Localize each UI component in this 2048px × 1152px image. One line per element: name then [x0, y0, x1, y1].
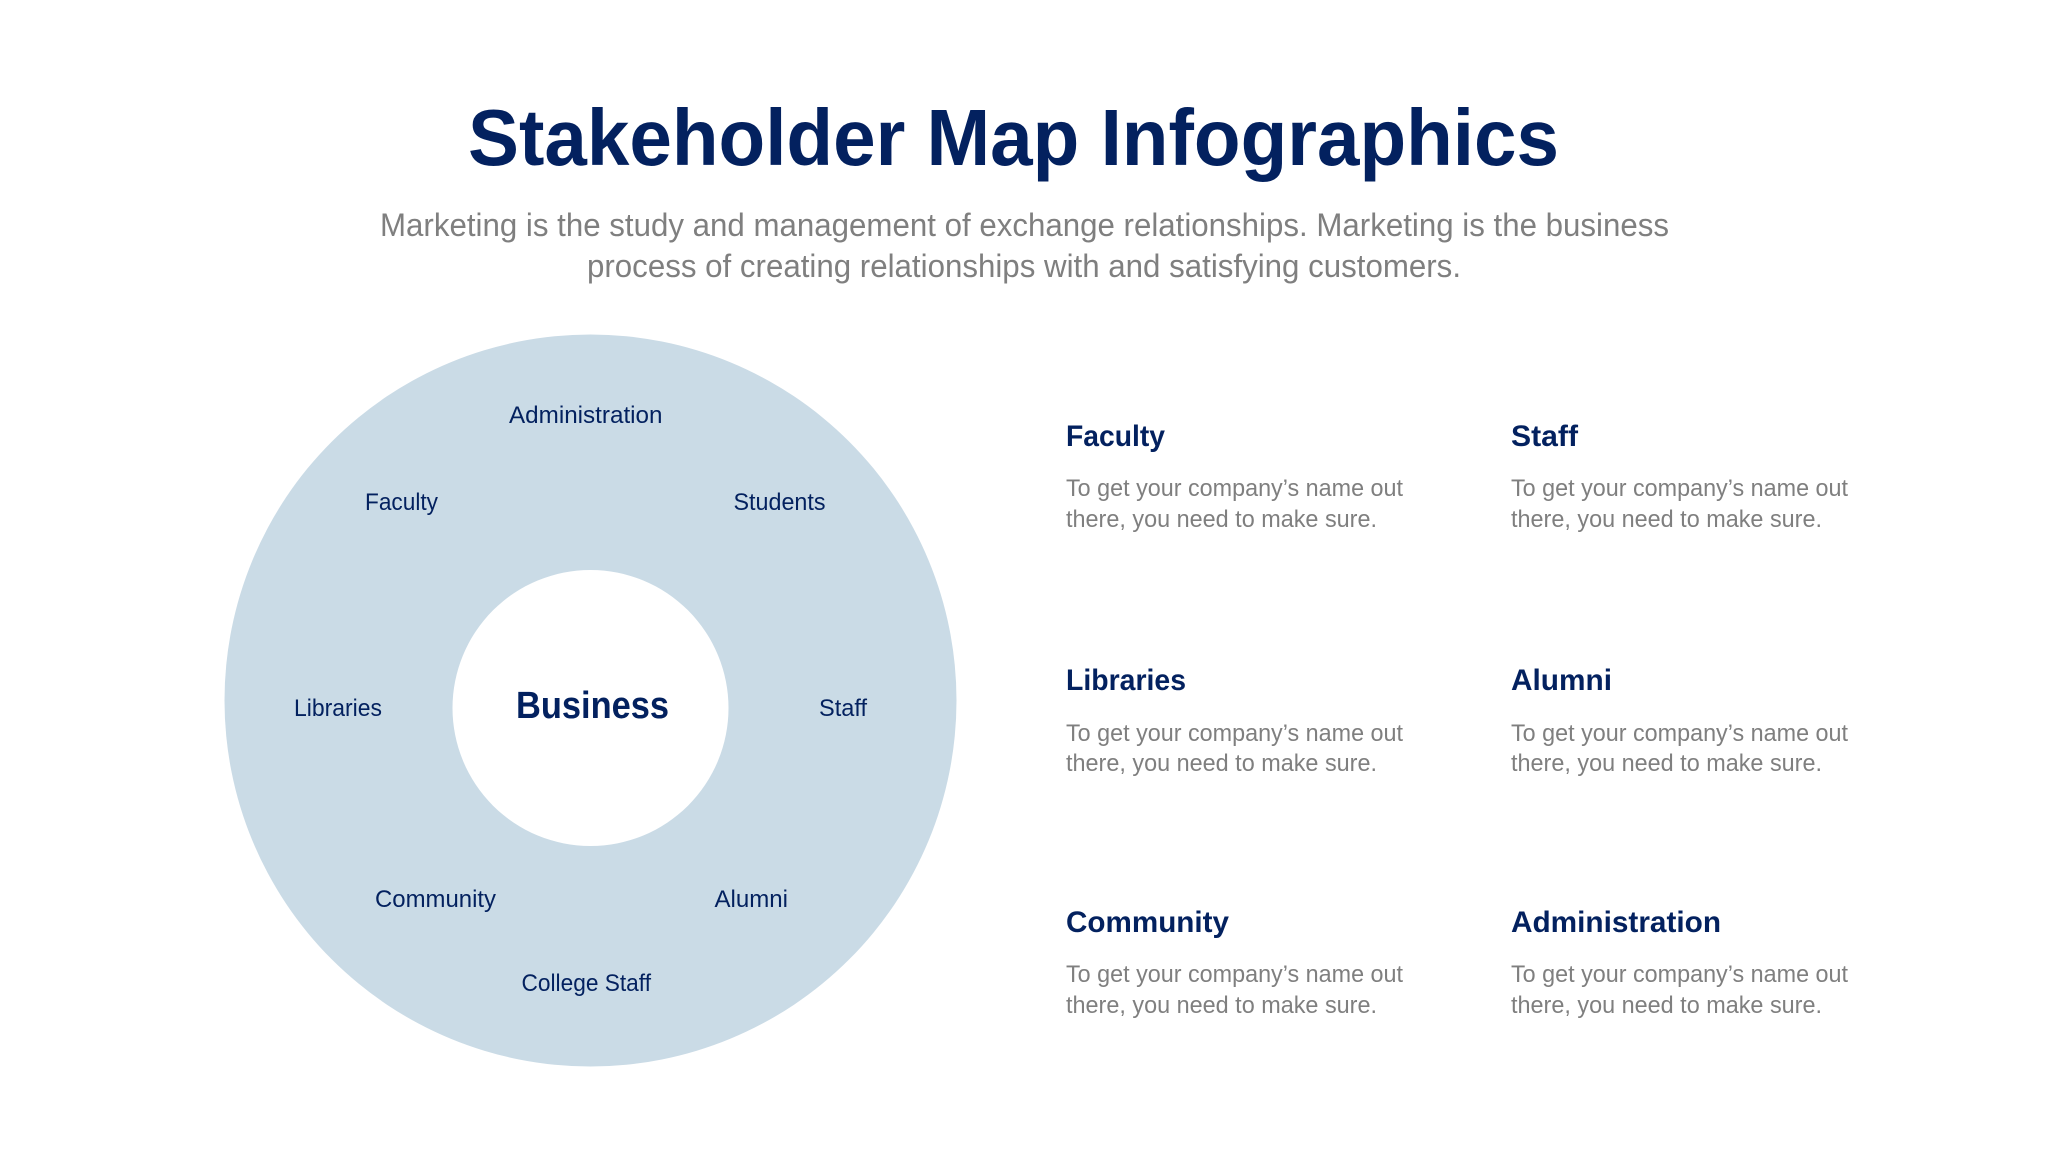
body text: there, you need to make sure. [1511, 750, 1822, 777]
ring label: Students: Students [734, 489, 826, 516]
heading: Faculty [1066, 420, 1165, 453]
heading: Libraries [1066, 664, 1186, 697]
subtitle text block: Marketing is the study and management of exchange relationships. Marketing is the business [380, 207, 1669, 243]
heading: Staff [1511, 420, 1579, 453]
panel: Libraries description [1066, 664, 1403, 777]
panel: Alumni description [1511, 664, 1848, 777]
body text [1066, 961, 1403, 1019]
body text: To get your company’s name out [1511, 720, 1848, 747]
heading: Alumni [1511, 664, 1612, 697]
heading: Community [1066, 906, 1229, 939]
body text: there, you need to make sure. [1066, 506, 1377, 533]
body text: there, you need to make sure. [1511, 506, 1822, 533]
body text: there, you need to make sure. [1511, 992, 1822, 1019]
outer ring [224, 334, 956, 1066]
ring label: Libraries: Libraries [294, 695, 382, 722]
body text: there, you need to make sure. [1066, 992, 1377, 1019]
subtitle text block [380, 207, 1669, 284]
body text: To get your company’s name out [1066, 475, 1403, 502]
body text [1511, 475, 1848, 533]
center label: Business: Business [516, 685, 669, 727]
panel: stakeholder ring diagram [224, 334, 956, 1066]
ring label: Faculty: Faculty [365, 489, 438, 516]
body text: there, you need to make sure. [1066, 750, 1377, 777]
ring label: Administration: Administration [509, 402, 662, 429]
body text [1511, 961, 1848, 1019]
ring label: Alumni: Alumni [714, 886, 788, 913]
panel: Staff description [1511, 420, 1848, 533]
body text [1066, 720, 1403, 777]
body text: To get your company’s name out [1511, 475, 1848, 502]
ring label: Staff: Staff [819, 695, 867, 722]
heading: Administration [1511, 906, 1721, 939]
ring label: Community: Community [375, 886, 496, 913]
body text: To get your company’s name out [1511, 961, 1848, 988]
body text [1511, 720, 1848, 777]
body text [1066, 475, 1403, 533]
title: Stakeholder Map Infographics [468, 93, 1559, 182]
body text: To get your company’s name out [1066, 961, 1403, 988]
subtitle text block: process of creating relationships with and satisfying customers. [587, 248, 1461, 284]
panel: Community description [1066, 906, 1403, 1019]
body text: To get your company’s name out [1066, 720, 1403, 747]
ring label: College Staff: College Staff [522, 970, 651, 997]
panel: Faculty description [1066, 420, 1403, 533]
panel: Administration description [1511, 906, 1848, 1019]
inner circle [452, 570, 728, 846]
